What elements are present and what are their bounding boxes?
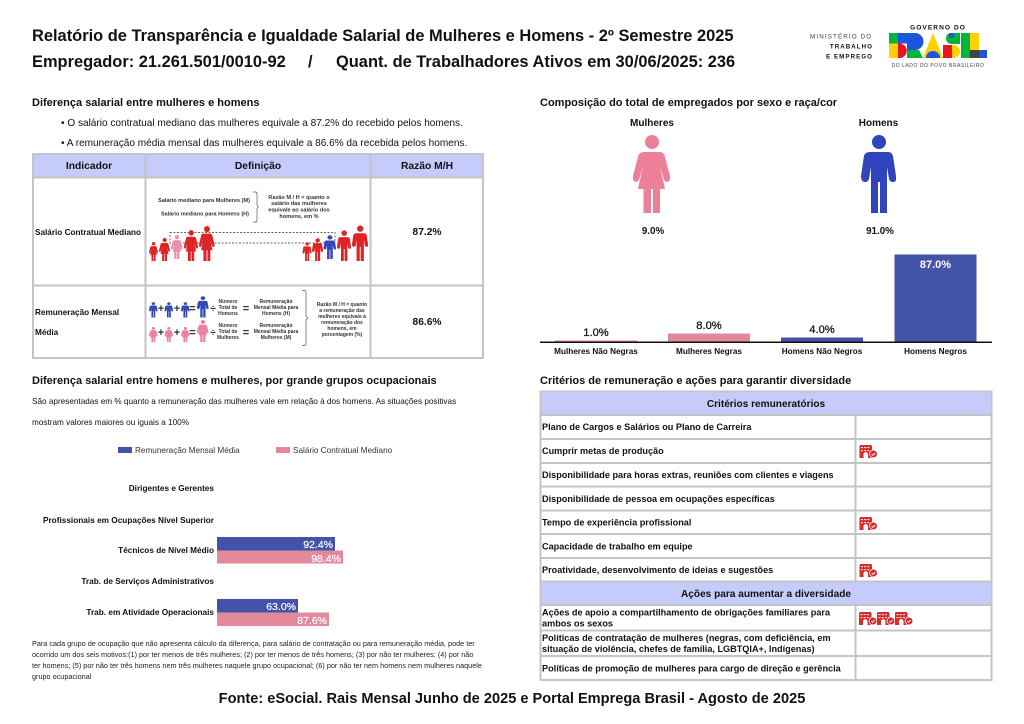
table: indicadores: Salário Contratual Mediano xyxy=(35,228,141,237)
footer: fonte: Fonte: eSocial. Rais Mensal Junho de 2025 e Portal Emprega Brasil - Agosto de 2025 xyxy=(219,691,805,707)
diagram: remuneração média: Total de xyxy=(219,305,238,311)
table: critérios e ações: Disponibilidade de pessoa em ocupações específicas xyxy=(542,494,775,504)
table: critérios e ações: Plano de Cargos e Salários ou Plano de Carreira xyxy=(542,422,752,432)
heading: diferença salarial: Diferença salarial entre mulheres e homens xyxy=(32,97,259,109)
logo: Governo do Brasil: DO LADO DO POVO BRASILEIRO xyxy=(892,63,984,69)
panel: composição por sexo e raça/cor xyxy=(540,97,992,356)
text block: nota: Para cada grupo de ocupação que não apresenta cálculo da diferença, para salário de contratação ou para remuneração média, pode ter xyxy=(32,639,475,648)
diagram: remuneração média: Número xyxy=(219,323,237,329)
text block: nota: ocorrido um dos seis motivos:(1) por ter menos de três mulheres; (2) por ter menos de três homens; (3) por não ter mulheres; (4) por não xyxy=(32,650,473,659)
diagram: remuneração média: Homens (H) xyxy=(262,311,290,317)
text block: explicação: mostram valores maiores ou iguais a 100% xyxy=(32,418,189,427)
diagram: remuneração média: = xyxy=(189,303,196,315)
bar chart: grupos ocupacionais: 98.4% xyxy=(311,553,341,565)
diagram: remuneração média: = xyxy=(189,327,196,339)
table: critérios e ações: Políticas de promoção de mulheres para cargo de direção e gerência xyxy=(542,664,842,674)
logo: Governo do Brasil: GOVERNO DO xyxy=(910,24,966,32)
icon: mulheres 9.0% xyxy=(630,118,674,237)
diagram: remuneração média: Razão M / H = quanto xyxy=(317,302,367,308)
table: critérios e ações: Ações para aumentar a diversidade xyxy=(681,589,851,600)
diagram: remuneração média: Mensal Média para xyxy=(254,329,298,335)
legend: Remuneração Mensal Média xyxy=(135,446,240,455)
table: critérios e ações: Disponibilidade para horas extras, reuniões com clientes e viagens xyxy=(542,470,834,480)
panel: diferença por grande grupo ocupacional xyxy=(32,375,482,681)
text block: resumo: • O salário contratual mediano das mulheres equivale a 87.2% do recebido pelos homens. xyxy=(61,118,463,129)
table: indicadores xyxy=(33,154,483,358)
diagram: remuneração média: mulheres equivale à xyxy=(318,314,366,320)
table: indicadores: Média xyxy=(35,328,59,337)
diagram: remuneração média: + xyxy=(174,327,180,339)
title: Quant. de Trabalhadores Ativos em 30/06/2025: 236 xyxy=(336,53,735,71)
table: indicadores: Razão M/H xyxy=(401,161,453,172)
table: critérios e ações: situação de violência, chefes de família, LGBTQIA+, Indígenas) xyxy=(542,644,815,654)
logo: Ministério do Trabalho e Emprego xyxy=(810,32,873,60)
text block: explicação: São apresentadas em % quanto a remuneração das mulheres vale em relação à dos homens. As situações positivas xyxy=(32,397,456,406)
bar chart: grupos ocupacionais: Técnicos de Nível Médio xyxy=(118,546,214,555)
diagram: remuneração média: + xyxy=(158,327,164,339)
table: critérios e ações xyxy=(540,392,992,680)
logo: Ministério do Trabalho e Emprego: TRABALHO xyxy=(830,44,873,50)
diagram: remuneração média: ÷ xyxy=(210,304,216,315)
diagram: salário mediano xyxy=(149,192,368,261)
logo: Ministério do Trabalho e Emprego: E EMPREGO xyxy=(826,54,873,60)
text block: nota xyxy=(32,639,482,681)
panel: diferença salarial entre mulheres e homens xyxy=(32,97,483,358)
panel: critérios de remuneração e ações xyxy=(540,375,992,680)
table: critérios e ações: Critérios remuneratórios xyxy=(707,399,826,410)
diagram: salário mediano: equivale ao salário dos xyxy=(268,208,330,214)
table: critérios e ações: Políticas de contratação de mulheres (negras, com deficiência, em xyxy=(542,633,831,643)
text block: resumo: • A remuneração média mensal das mulheres equivale a 86.6% da recebida pelos homens. xyxy=(61,138,467,149)
icon: empresa com selo xyxy=(860,445,878,458)
title: Empregador: 21.261.501/0010-92 xyxy=(32,53,286,71)
logo: Governo do Brasil xyxy=(889,24,987,69)
diagram: remuneração média: Mulheres xyxy=(217,335,239,341)
title: Relatório de Transparência e Igualdade Salarial de Mulheres e Homens - 2º Semestre 2025 xyxy=(32,27,733,45)
diagram: remuneração média: Remuneração xyxy=(259,299,293,305)
diagram: remuneração média: Remuneração xyxy=(259,323,293,329)
table: indicadores: 86.6% xyxy=(413,317,441,328)
bar chart: raça/cor xyxy=(540,254,992,356)
icon: homens 91.0%: Homens xyxy=(859,118,899,129)
icon: empresa com selo xyxy=(860,564,878,577)
diagram: remuneração média: porcentagem (%) xyxy=(322,332,363,338)
icon: três empresas com selo xyxy=(859,612,913,625)
text block: nota: ter homens; (5) por não ter três homens nem três mulheres naquele grupo ocupacional; (6) por não ter nem homens nem mulheres naquele xyxy=(32,661,482,670)
text block: resumo xyxy=(61,118,467,149)
diagram: remuneração média: Total de xyxy=(219,329,238,335)
icon: empresa com selo xyxy=(860,517,878,530)
table: critérios e ações: Ações de apoio a compartilhamento de obrigações familiares para xyxy=(542,608,831,618)
bar chart: grupos ocupacionais: Dirigentes e Gerentes xyxy=(129,484,214,493)
diagram: remuneração média: homens, em xyxy=(327,326,357,332)
bar chart: grupos ocupacionais: 87.6% xyxy=(297,615,327,627)
diagram: salário mediano: Razão M / H = quanto o xyxy=(268,195,330,201)
diagram: salário mediano: Salário mediano para Mulheres (M) xyxy=(158,198,250,204)
table: critérios e ações: Capacidade de trabalho em equipe xyxy=(542,542,693,552)
icon: homens 91.0% xyxy=(859,118,899,237)
diagram: remuneração média: Mulheres (M) xyxy=(261,335,292,341)
heading: composição: Composição do total de empregados por sexo e raça/cor xyxy=(540,97,838,109)
bar chart: grupos ocupacionais: Trab. em Atividade Operacionais xyxy=(86,608,214,617)
bar chart: raça/cor: Homens Negros xyxy=(904,347,967,356)
bar chart: raça/cor: Homens Não Negros xyxy=(782,347,863,356)
bar chart: grupos ocupacionais: 92.4% xyxy=(303,539,333,551)
logo: Ministério do Trabalho e Emprego: MINISTÉRIO DO xyxy=(810,32,872,40)
bar chart: grupos ocupacionais: Trab. de Serviços Administrativos xyxy=(81,577,214,586)
table: critérios e ações: Tempo de experiência profissional xyxy=(542,518,691,528)
bar chart: raça/cor: 87.0% xyxy=(920,259,951,271)
table: indicadores: 87.2% xyxy=(413,227,441,238)
bar chart: raça/cor: Mulheres Negras xyxy=(676,347,742,356)
icon: mulheres 9.0%: Mulheres xyxy=(630,118,674,129)
bar chart: grupos ocupacionais xyxy=(43,484,343,627)
diagram: remuneração média: + xyxy=(174,303,180,315)
icon: homens 91.0%: 91.0% xyxy=(866,226,894,237)
heading: critérios: Critérios de remuneração e ações para garantir diversidade xyxy=(540,375,851,387)
diagram: remuneração média: Mensal Média para xyxy=(254,305,298,311)
table: indicadores: Definição xyxy=(235,161,281,172)
table: critérios e ações: ambos os sexos xyxy=(542,618,613,628)
diagram: salário mediano: Salário mediano para Homens (H) xyxy=(161,212,249,218)
diagram: remuneração média: + xyxy=(158,303,164,315)
bar chart: raça/cor: Mulheres Não Negras xyxy=(554,347,638,356)
bar chart: raça/cor: 4.0% xyxy=(809,324,835,336)
diagram: remuneração média xyxy=(149,290,367,346)
bar chart: raça/cor: 8.0% xyxy=(696,320,722,332)
diagram: remuneração média: remuneração dos xyxy=(321,320,363,326)
bar chart: grupos ocupacionais: 63.0% xyxy=(266,601,296,613)
diagram: remuneração média: Homens xyxy=(218,311,238,317)
text block: explicação xyxy=(32,397,456,427)
bar chart: grupos ocupacionais: Profissionais em Ocupações Nível Superior xyxy=(43,516,215,525)
table: critérios e ações: Proatividade, desenvolvimento de ideias e sugestões xyxy=(542,565,773,575)
legend xyxy=(118,446,393,455)
diagram: salário mediano: salário das mulheres xyxy=(271,201,327,207)
table: indicadores: Remuneração Mensal xyxy=(35,308,119,317)
diagram: remuneração média: a remuneração das xyxy=(319,308,365,314)
text block: nota: grupo ocupacional xyxy=(32,672,92,681)
title xyxy=(32,27,735,71)
title: / xyxy=(308,53,313,71)
icon: mulheres 9.0%: 9.0% xyxy=(642,226,664,237)
diagram: remuneração média: = xyxy=(243,327,249,339)
diagram: remuneração média: ÷ xyxy=(210,328,216,339)
table: indicadores: Indicador xyxy=(66,161,112,172)
diagram: remuneração média: Número xyxy=(219,299,237,305)
diagram: salário mediano: homens, em % xyxy=(279,214,319,220)
bar chart: raça/cor: 1.0% xyxy=(583,327,609,339)
legend: Salário Contratual Mediano xyxy=(293,446,393,455)
table: critérios e ações: Cumprir metas de produção xyxy=(542,446,664,456)
heading: grupos ocupacionais: Diferença salarial entre homens e mulheres, por grande grupos ocupacionais xyxy=(32,375,437,387)
diagram: remuneração média: = xyxy=(243,303,249,315)
